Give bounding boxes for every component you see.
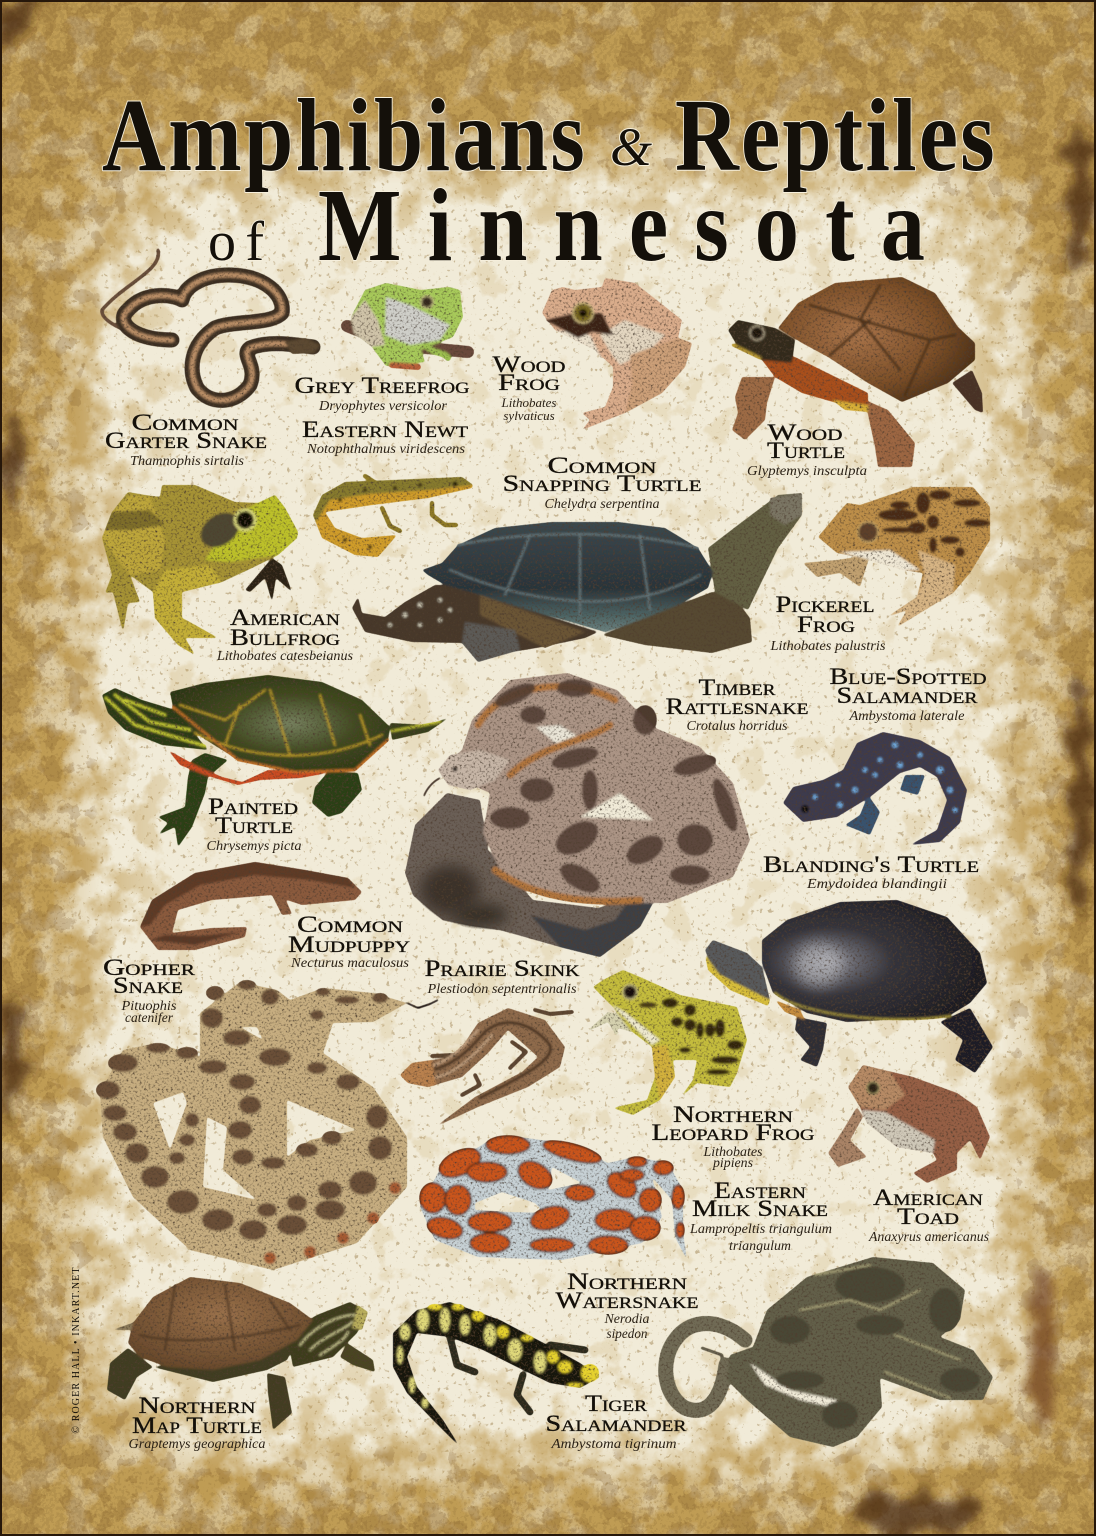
- label: grey treefrog: [294, 373, 470, 414]
- label: american toad: American: [873, 1185, 984, 1210]
- illustration: prairie skink: [400, 1008, 572, 1127]
- label: common snapping turtle: Snapping Turtle: [502, 471, 702, 496]
- label: american toad: [868, 1185, 990, 1245]
- illustration: painted turtle: [102, 675, 450, 847]
- species: wood turtle: [728, 277, 983, 479]
- illustration: blue-spotted salamander: [783, 732, 967, 845]
- species: northern leopard frog: [586, 970, 815, 1171]
- species: northern watersnake: [556, 1257, 993, 1447]
- label: blue-spotted salamander: Blue-Spotted: [830, 664, 986, 689]
- species: american bullfrog: [102, 485, 354, 664]
- species: pickerel frog: [769, 487, 990, 654]
- label: eastern newt: [302, 417, 468, 457]
- title: of: [208, 211, 264, 273]
- illustration: garter snake: [102, 250, 320, 400]
- title: Minnesota: [318, 167, 925, 283]
- label: timber rattlesnake: Crotalus horridus: [686, 719, 788, 734]
- label: american bullfrog: Lithobates catesbeianus: [216, 649, 354, 664]
- label: northern watersnake: sipedon: [606, 1327, 648, 1342]
- label: gopher snake: Snake: [113, 973, 183, 998]
- species: tiger salamander: [393, 1302, 687, 1452]
- illustration: blanding's turtle: [705, 900, 993, 1073]
- label: wood frog: Lithobates: [501, 395, 556, 410]
- label: northern leopard frog: [652, 1102, 815, 1171]
- label: common garter snake: Common: [132, 410, 239, 435]
- illustration: northern leopard frog: [586, 970, 747, 1115]
- label: northern map turtle: [128, 1393, 266, 1452]
- illustration: eastern milk snake: [420, 1136, 687, 1260]
- species: blanding's turtle: [705, 852, 993, 1073]
- illustration: tiger salamander: [393, 1302, 600, 1447]
- label: northern map turtle: Map Turtle: [132, 1413, 262, 1438]
- label: blanding's turtle: Emydoidea blandingii: [806, 877, 947, 892]
- artist credit: © ROGER HALL • INKART.NET: [71, 1266, 82, 1434]
- label: grey treefrog: Grey Treefrog: [294, 373, 470, 398]
- label: gopher snake: Gopher: [103, 955, 195, 980]
- label: prairie skink: Prairie Skink: [424, 956, 580, 981]
- label: tiger salamander: Salamander: [546, 1411, 687, 1436]
- label: common mudpuppy: Common: [297, 912, 404, 937]
- label: wood turtle: Turtle: [767, 438, 845, 463]
- label: blue-spotted salamander: Salamander: [836, 683, 978, 708]
- species: blue-spotted salamander: [783, 664, 986, 845]
- species: timber rattlesnake: [405, 673, 808, 957]
- label: common snapping turtle: [502, 453, 702, 512]
- label: timber rattlesnake: Timber: [698, 675, 776, 700]
- illustration: pickerel frog: [803, 487, 990, 627]
- label: american bullfrog: Bullfrog: [230, 625, 341, 650]
- species: american toad: [828, 1065, 990, 1245]
- label: tiger salamander: Tiger: [585, 1391, 647, 1416]
- label: common garter snake: Thamnophis sirtalis: [130, 454, 245, 469]
- species: wood frog: [492, 278, 692, 430]
- species: eastern milk snake: [420, 1136, 832, 1260]
- species: painted turtle: [102, 675, 450, 854]
- illustration: northern watersnake: [666, 1257, 993, 1447]
- label: pickerel frog: Pickerel: [776, 592, 874, 617]
- label: northern leopard frog: Lithobates: [703, 1145, 763, 1160]
- label: american toad: Toad: [897, 1204, 959, 1229]
- label: wood frog: [492, 352, 566, 423]
- label: american bullfrog: [216, 605, 354, 664]
- species: northern map turtle: [107, 1277, 375, 1452]
- label: timber rattlesnake: Rattlesnake: [666, 694, 808, 719]
- label: painted turtle: Turtle: [215, 813, 293, 838]
- label: wood frog: Wood: [492, 352, 566, 377]
- label: tiger salamander: Ambystoma tigrinum: [550, 1437, 676, 1452]
- label: pickerel frog: Lithobates palustris: [769, 639, 886, 654]
- label: blue-spotted salamander: Ambystoma laterale: [848, 709, 964, 724]
- label: eastern newt: Notophthalmus viridescens: [306, 442, 466, 457]
- label: blanding's turtle: Blanding's Turtle: [763, 852, 979, 877]
- label: common mudpuppy: [288, 912, 411, 971]
- title: [102, 77, 995, 283]
- illustration: wood turtle: [728, 277, 983, 467]
- label: northern watersnake: Northern: [567, 1269, 688, 1294]
- label: gopher snake: [103, 955, 195, 1026]
- label: eastern newt: Eastern Newt: [302, 417, 468, 442]
- illustration: northern map turtle: [107, 1277, 375, 1430]
- label: american bullfrog: American: [230, 605, 341, 630]
- label: painted turtle: Chrysemys picta: [206, 839, 302, 854]
- illustration: eastern newt: [313, 476, 473, 557]
- label: timber rattlesnake: [666, 675, 808, 734]
- label: northern map turtle: Graptemys geographica: [128, 1437, 266, 1452]
- label: painted turtle: [206, 794, 302, 854]
- label: eastern milk snake: Milk Snake: [692, 1196, 828, 1221]
- species: common mudpuppy: [140, 862, 411, 971]
- species: grey treefrog: [294, 283, 470, 414]
- illustration: timber rattlesnake: [405, 673, 750, 957]
- label: gopher snake: catenifer: [125, 1011, 174, 1026]
- illustration: gopher snake: [96, 980, 438, 1270]
- label: grey treefrog: Dryophytes versicolor: [318, 399, 448, 414]
- illustration: wood frog: [542, 278, 692, 430]
- label: common garter snake: [105, 410, 267, 469]
- title: &: [610, 117, 652, 177]
- label: painted turtle: Painted: [208, 794, 298, 819]
- label: common mudpuppy: Necturus maculosus: [290, 956, 410, 971]
- label: pickerel frog: Frog: [797, 612, 856, 637]
- label: eastern milk snake: triangulum: [729, 1239, 791, 1254]
- title: Reptiles: [675, 77, 995, 193]
- label: prairie skink: Plestiodon septentrionalis: [426, 982, 577, 997]
- illustration: common mudpuppy: [140, 862, 362, 950]
- label: northern leopard frog: pipiens: [712, 1156, 754, 1171]
- label: wood frog: Frog: [498, 370, 561, 395]
- label: northern watersnake: Watersnake: [556, 1288, 698, 1313]
- label: blanding's turtle: [763, 852, 979, 892]
- label: gopher snake: Pituophis: [120, 999, 177, 1014]
- label: common garter snake: Garter Snake: [105, 428, 267, 453]
- label: eastern milk snake: Eastern: [714, 1178, 807, 1203]
- label: blue-spotted salamander: [830, 664, 986, 724]
- label: wood turtle: Wood: [768, 420, 842, 445]
- label: northern leopard frog: Northern: [673, 1102, 794, 1127]
- species: eastern newt: [302, 417, 473, 557]
- label: northern leopard frog: Leopard Frog: [652, 1120, 815, 1145]
- label: common mudpuppy: Mudpuppy: [288, 932, 411, 957]
- illustration: common snapping turtle: [352, 493, 802, 662]
- label: eastern milk snake: [689, 1178, 832, 1254]
- illustration: american bullfrog: [102, 485, 298, 655]
- illustration: american toad: [828, 1065, 990, 1183]
- label: common snapping turtle: Common: [548, 453, 657, 478]
- species: common snapping turtle: [352, 453, 802, 662]
- title: Amphibians: [102, 77, 585, 193]
- label: common snapping turtle: Chelydra serpentina: [544, 497, 660, 512]
- species: gopher snake: [96, 955, 438, 1270]
- label: prairie skink: [424, 956, 580, 997]
- label: wood turtle: [747, 420, 867, 479]
- label: wood turtle: Glyptemys insculpta: [747, 464, 867, 479]
- label: eastern milk snake: Lampropeltis triangulum: [689, 1222, 832, 1237]
- species: prairie skink: [400, 956, 580, 1127]
- label: northern map turtle: Northern: [138, 1393, 256, 1418]
- label: pickerel frog: [769, 592, 886, 654]
- label: wood frog: sylvaticus: [503, 408, 555, 423]
- species: common garter snake: [102, 250, 320, 469]
- illustration: grey treefrog: [347, 283, 468, 367]
- label: northern watersnake: [556, 1269, 698, 1342]
- label: northern watersnake: Nerodia: [604, 1312, 650, 1327]
- label: american toad: Anaxyrus americanus: [868, 1230, 990, 1245]
- label: tiger salamander: [546, 1391, 687, 1452]
